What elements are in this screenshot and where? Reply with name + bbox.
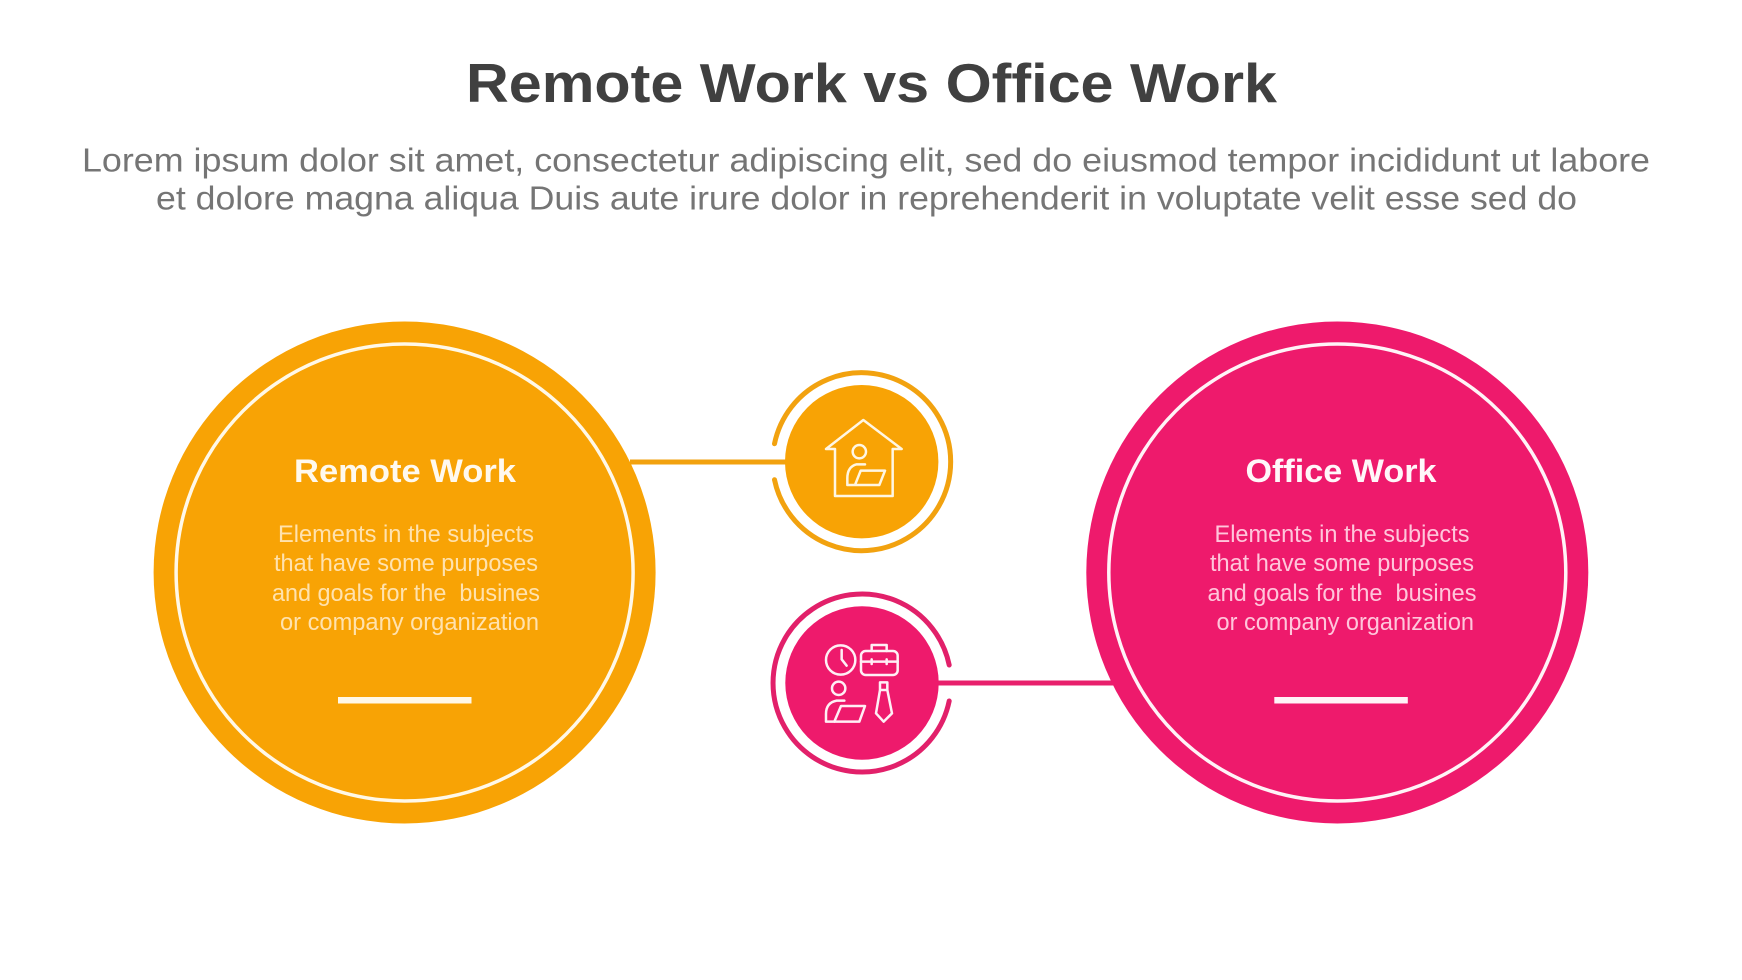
disc: remote bbox=[785, 385, 938, 538]
description: remote work: or company organization bbox=[280, 609, 539, 636]
description: office work: and goals for the busines bbox=[1208, 580, 1476, 607]
description: office work bbox=[1208, 521, 1476, 636]
connector: remote work bbox=[630, 460, 790, 464]
inner ring: remote work bbox=[176, 344, 633, 801]
heading: remote work: Remote Work bbox=[294, 453, 516, 489]
description: remote work: Elements in the subjects bbox=[278, 521, 534, 548]
divider bar: remote work bbox=[338, 697, 472, 704]
circle: remote work background bbox=[154, 322, 656, 824]
description: office work: that have some purposes bbox=[1210, 550, 1474, 577]
badge: office work icon bbox=[773, 594, 949, 772]
description: remote work: and goals for the busines bbox=[272, 580, 540, 607]
subtitle bbox=[82, 142, 1650, 216]
connector: office work bbox=[935, 680, 1115, 686]
title: Remote Work vs Office Work bbox=[466, 52, 1277, 114]
description: office work: or company organization bbox=[1216, 609, 1474, 636]
description: remote work: that have some purposes bbox=[274, 550, 538, 577]
divider bar: office work bbox=[1274, 697, 1408, 704]
circle: office work background bbox=[1086, 322, 1588, 824]
panel: remote work bbox=[154, 322, 656, 824]
inner ring: office work bbox=[1109, 344, 1566, 801]
disc: office bbox=[785, 606, 939, 760]
subtitle: et dolore magna aliqua Duis aute irure dolor in reprehenderit in voluptate velit esse sed do bbox=[156, 180, 1577, 216]
subtitle: Lorem ipsum dolor sit amet, consectetur adipiscing elit, sed do eiusmod tempor incididunt ut labore bbox=[82, 142, 1650, 178]
panel: office work bbox=[1086, 322, 1588, 824]
icon: house with remote worker bbox=[826, 420, 902, 496]
badge: remote work icon bbox=[774, 373, 951, 551]
open ring: office bbox=[773, 594, 949, 772]
description: office work: Elements in the subjects bbox=[1214, 521, 1470, 548]
icon: clock, briefcase, worker and tie bbox=[826, 645, 898, 722]
description: remote work bbox=[272, 521, 540, 636]
heading: office work: Office Work bbox=[1246, 453, 1437, 489]
open ring: remote bbox=[774, 373, 951, 551]
